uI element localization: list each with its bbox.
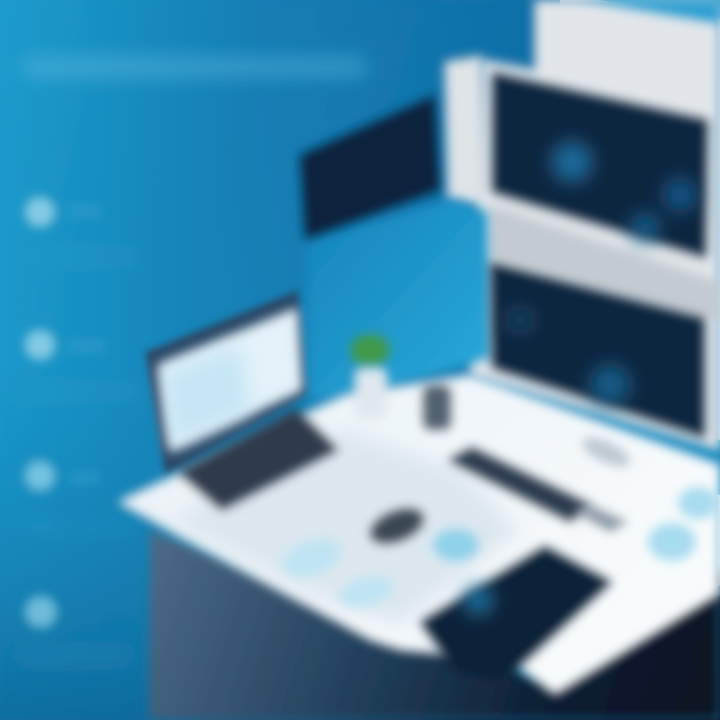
laptop xyxy=(145,290,338,510)
mouse xyxy=(365,502,429,550)
desk shadow area xyxy=(170,430,520,625)
bullet item 2 xyxy=(22,330,142,399)
tablet xyxy=(420,546,612,680)
dark monitor: upper right xyxy=(492,72,708,258)
laptop keyboard xyxy=(178,408,338,510)
light blue desk papers xyxy=(278,487,718,613)
wall panel: upper right xyxy=(470,0,720,450)
monitor stand base xyxy=(578,432,634,472)
heading placeholder xyxy=(22,56,367,78)
laptop screen xyxy=(158,308,302,452)
monitor glow xyxy=(590,365,630,405)
dark monitor: lower right xyxy=(490,262,705,438)
bullet item 4 xyxy=(22,596,132,664)
tablet glow xyxy=(464,586,492,614)
bullet item 3 xyxy=(22,461,132,534)
laptop screen frame xyxy=(145,290,306,475)
desk cabinet and dark floor xyxy=(150,530,720,720)
list: four bullet items xyxy=(22,197,142,664)
monitor glow xyxy=(552,142,592,182)
plant xyxy=(350,334,390,418)
desk top xyxy=(118,375,720,695)
bullet item 1 xyxy=(22,197,142,264)
cup xyxy=(423,385,451,430)
dark monitor: upper left xyxy=(300,95,440,240)
keyboard xyxy=(448,447,592,522)
wall post xyxy=(445,56,485,205)
blue centre screen xyxy=(306,198,490,400)
